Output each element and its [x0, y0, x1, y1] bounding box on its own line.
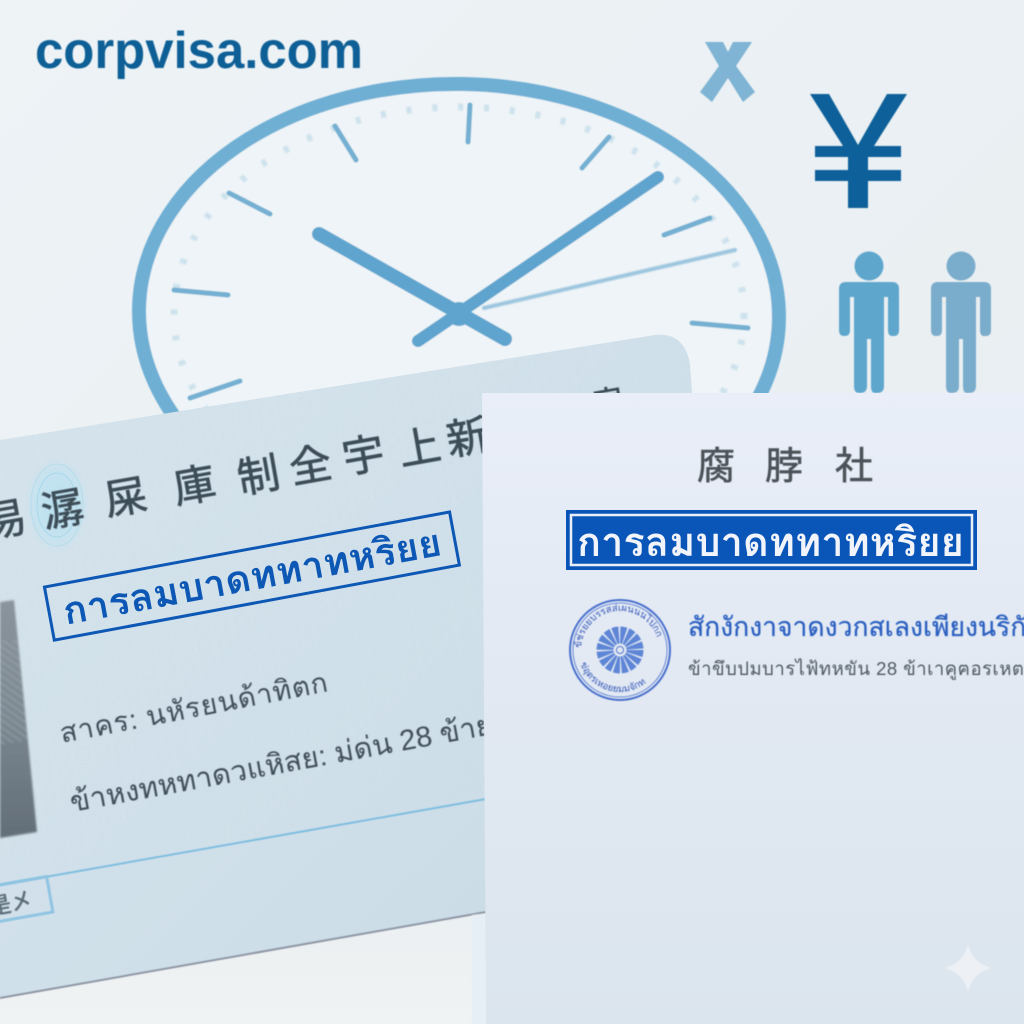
paper banner: การลมบาดททาทหริยย [577, 521, 964, 565]
table surface [0, 900, 500, 1024]
paper edge glow [472, 915, 488, 1024]
icon: yen [810, 94, 907, 208]
clock face [137, 78, 781, 550]
clock ring [135, 78, 783, 550]
panel: residence card [0, 335, 694, 998]
paper heading [697, 446, 873, 488]
card heading: 新 [443, 411, 492, 465]
logo: corpvisa.com: corpvisa.com [35, 22, 363, 80]
paper body [480, 393, 1024, 1024]
round seal [568, 598, 672, 702]
icon: person one [839, 252, 899, 393]
panel: notice paper [482, 393, 1024, 1024]
card stamp: การลมบาดททาทหริยย [60, 522, 445, 634]
second hand [484, 250, 735, 308]
round seal: ข่อุตรเหอยยมมจักท [580, 662, 646, 693]
icon: sparkle [944, 944, 992, 992]
card heading: 制 [234, 449, 283, 503]
round seal: ข้ช่รยยบรรสส่เผนนนไปกก [573, 603, 662, 648]
card body [0, 335, 694, 998]
paper heading: 脖 [765, 446, 803, 488]
hour hand [319, 234, 505, 339]
clock hub [447, 302, 471, 326]
card name line: สาคร: นหัรยนด้าทิตก [57, 667, 330, 749]
clock [135, 78, 783, 550]
card heading: 上 [395, 421, 444, 475]
card heading [0, 384, 626, 547]
card heading: 宇 [339, 429, 388, 483]
paper heading: 腐 [697, 446, 735, 488]
paper banner [566, 510, 977, 570]
minute ticks [174, 107, 744, 521]
card guilloche [0, 335, 694, 885]
paper heading: 社 [835, 446, 873, 488]
card bottom edge [0, 912, 486, 998]
card heading: 屎 [101, 471, 150, 525]
hour ticks [174, 105, 748, 398]
icon: person two [931, 252, 991, 393]
card heading: 家 [591, 384, 626, 421]
card small stamp [0, 877, 53, 926]
minute hand [418, 177, 658, 341]
card heading: 潺 [38, 483, 87, 537]
card heading: 全 [286, 439, 335, 493]
card photo [0, 600, 37, 838]
icon: x mark [700, 42, 755, 102]
card divider [0, 799, 486, 885]
card date line: ข้าหงทหทาดวแหิสย: ม่ด่น 28 ข้ายะ [67, 706, 511, 819]
hologram [30, 464, 84, 546]
card heading: 庫 [170, 459, 219, 513]
